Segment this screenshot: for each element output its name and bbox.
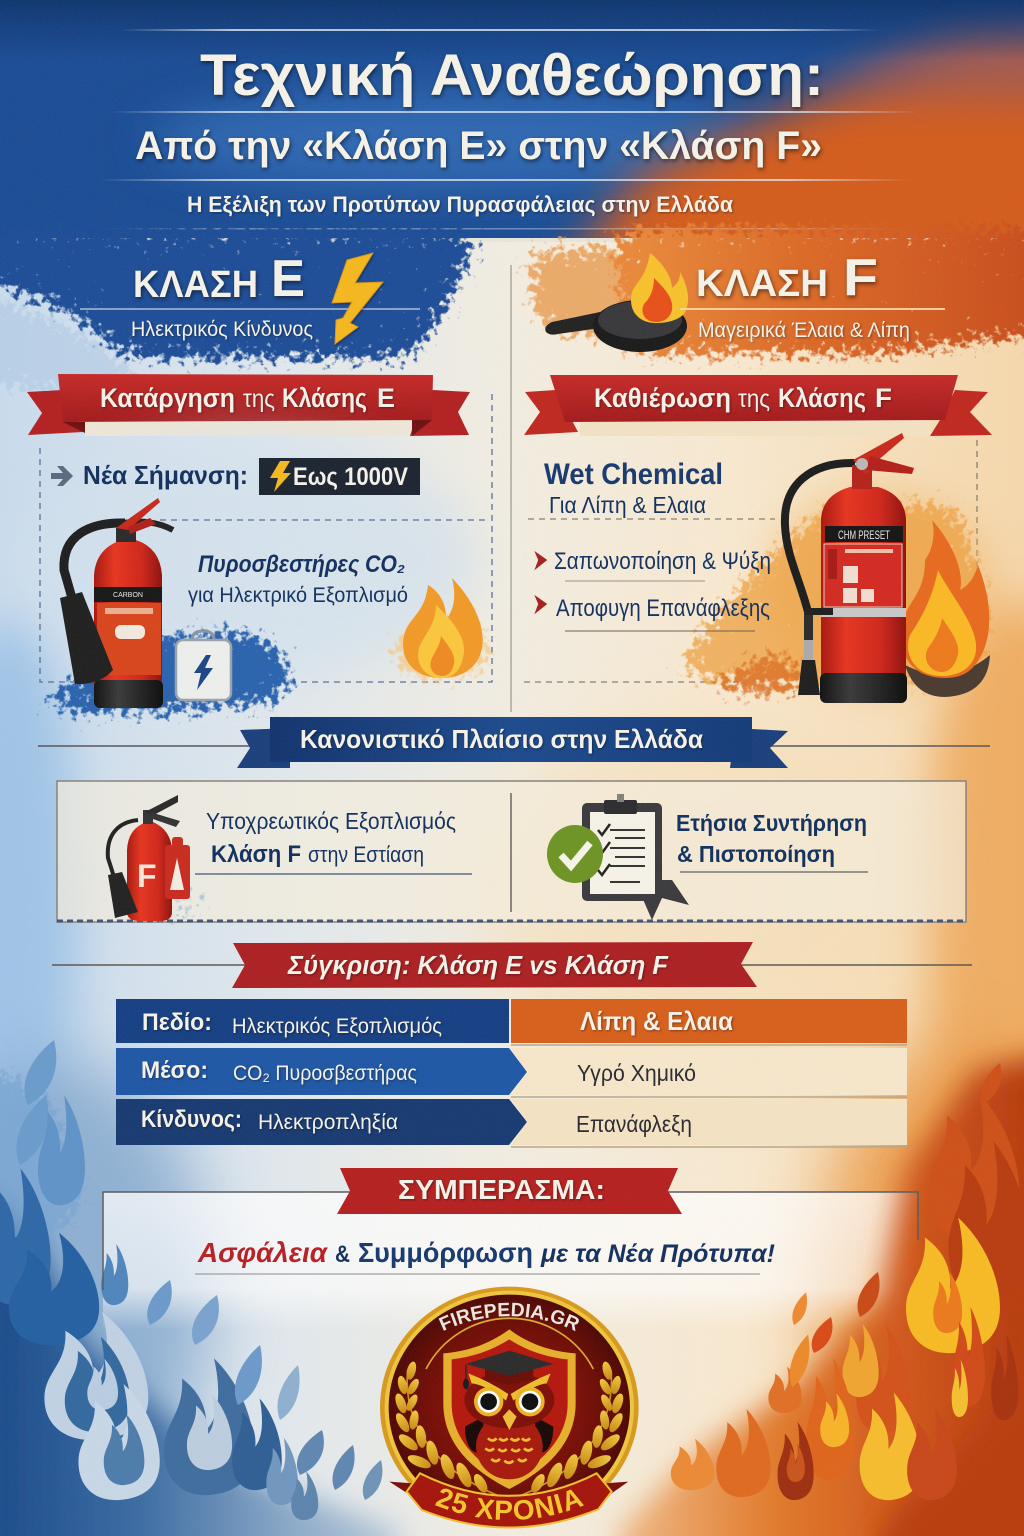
ribbon: abolition of class E: της	[243, 385, 275, 413]
banner: regulatory framework: Κανονιστικό Πλαίσιο στην Ελλάδα	[300, 724, 703, 754]
CO2 caption: για Ηλεκτρικό Εξοπλισμό	[188, 583, 408, 607]
icon: class F extinguisher: F	[137, 858, 157, 894]
class E heading	[80, 250, 420, 341]
badge ribbon	[390, 1472, 628, 1528]
reignition bullet: Αποφυγη Επανάφλεξης	[556, 595, 770, 622]
ribbon: establishment of class F: F	[875, 383, 892, 413]
annual maintenance caption: & Πιστοποίηση	[677, 841, 835, 867]
badge top text: FIREPEDIA.GR	[438, 1302, 579, 1332]
wet chemical extinguisher: CHM PRESET	[838, 528, 890, 542]
badge: firepedia 25 years	[380, 1286, 639, 1528]
mandatory equipment caption: στην Εστίαση	[308, 842, 424, 867]
annual maintenance caption: Ετήσια Συντήρηση	[676, 810, 867, 836]
wet chemical heading: Για Λίπη & Ελαια	[549, 492, 706, 518]
icon: battery with bolt	[176, 631, 231, 700]
class E heading: Ηλεκτρικός Κίνδυνος	[131, 317, 313, 341]
conclusion frame	[103, 1192, 918, 1290]
flames: blue left	[0, 1040, 400, 1536]
badge laurel	[393, 1361, 509, 1500]
table rows: class E	[116, 999, 527, 1145]
subtitle line: Από την «Κλάση Ε» στην «Κλάση F»	[135, 124, 822, 168]
table rows: class E: Κίνδυνος:	[141, 1106, 242, 1133]
ribbon: establishment of class F	[524, 375, 992, 436]
wet chemical heading: Wet Chemical	[544, 458, 723, 491]
new marking line: Νέα Σήμανση:	[83, 460, 248, 490]
ribbon: establishment of class F: Καθιέρωση	[594, 383, 731, 413]
saponification bullet	[536, 548, 771, 581]
class F heading	[680, 249, 945, 342]
mandatory equipment caption: Κλάση F	[211, 841, 301, 868]
annual maintenance caption	[676, 810, 868, 872]
CO2 extinguisher	[60, 498, 173, 708]
class E band	[0, 225, 485, 400]
conclusion statement: Ασφάλεια	[197, 1237, 329, 1268]
new marking line: Εως 1000V	[293, 463, 408, 491]
class F heading: F	[843, 249, 878, 307]
banner: regulatory framework	[38, 717, 990, 768]
banner: conclusion: ΣΥΜΠΕΡΑΣΜΑ:	[398, 1174, 605, 1205]
icon: class F extinguisher	[108, 795, 190, 921]
banner: comparison	[52, 942, 972, 988]
badge owl	[464, 1372, 554, 1479]
flame: class E	[385, 578, 490, 680]
comparison table	[116, 999, 907, 1147]
class F heading: ΚΛΑΣΗ	[696, 263, 828, 305]
blue splash behind CO2 extinguisher	[35, 628, 300, 716]
panel: class F dashed frame	[524, 440, 977, 682]
pale blue wash: class E panel	[20, 440, 480, 680]
conclusion statement: με τα Νέα Πρότυπα!	[540, 1240, 775, 1268]
ribbon: abolition of class E	[27, 374, 470, 436]
header background	[0, 0, 1024, 238]
table rows: class E: CO₂ Πυροσβεστήρας	[233, 1062, 417, 1085]
table rows: class E: Ηλεκτρικός Εξοπλισμός	[232, 1015, 442, 1038]
banner: comparison: Σύγκριση: Κλάση Ε vs Κλάση F	[287, 950, 669, 980]
badge laurel mirrored	[509, 1361, 626, 1500]
badge ribbon: 25 ΧΡΟΝΙΑ	[435, 1488, 584, 1520]
class E heading: Ε	[271, 250, 305, 308]
CO2 caption: Πυροσβεστήρες CO₂	[198, 551, 405, 578]
orange splash behind wet chemical extinguisher	[670, 495, 990, 698]
conclusion statement: Συμμόρφωση	[358, 1237, 533, 1268]
ribbon: establishment of class F: Κλάσης	[778, 383, 866, 413]
icon: lightning bolt	[332, 253, 383, 344]
class F heading: Μαγειρικά Έλαια & Λίπη	[698, 318, 910, 342]
wet chemical extinguisher	[785, 433, 914, 703]
CO2 caption	[188, 551, 408, 607]
banner: conclusion	[337, 1168, 682, 1214]
ribbon: abolition of class E: Κλάσης	[282, 383, 367, 413]
panel: conclusion backing	[103, 1192, 918, 1330]
new marking line	[51, 458, 420, 495]
badge shield	[443, 1329, 576, 1489]
class F band	[525, 225, 1024, 358]
flame in pan	[901, 520, 990, 697]
conclusion statement: &	[335, 1241, 350, 1268]
title: Τεχνική Αναθεώρηση:	[200, 43, 824, 108]
mandatory equipment caption	[195, 808, 472, 874]
icon: frying pan with flame	[545, 253, 688, 352]
table rows: class F: Υγρό Χημικό	[577, 1060, 696, 1086]
table rows: class E: Πεδίο:	[142, 1009, 212, 1036]
table rows: class E: Ηλεκτροπληξία	[258, 1111, 398, 1134]
icon: clipboard and check	[547, 794, 689, 920]
ribbon: abolition of class E: Ε	[377, 383, 395, 413]
saponification bullet: Σαπωνοποίηση & Ψύξη	[554, 548, 771, 575]
reignition bullet	[536, 595, 770, 631]
mandatory equipment caption: Υποχρεωτικός Εξοπλισμός	[206, 808, 456, 834]
table rows: class E: Μέσο:	[141, 1057, 208, 1084]
flames: orange right	[620, 1010, 1024, 1536]
CO2 extinguisher: CARBON	[113, 592, 143, 599]
column divider	[510, 265, 512, 712]
class E heading: ΚΛΑΣΗ	[133, 264, 258, 306]
header rule lines	[0, 29, 1024, 242]
header strapline: Η Εξέλιξη των Προτύπων Πυρασφάλειας στην Ελλάδα	[187, 192, 733, 217]
conclusion statement	[195, 1237, 775, 1274]
badge cap	[463, 1351, 553, 1389]
small blue splash	[125, 890, 230, 920]
panel: regulatory framework	[57, 781, 966, 922]
table rows: class F: Λίπη & Ελαια	[580, 1006, 733, 1036]
table rows: class F	[511, 999, 907, 1147]
table rows: class F: Επανάφλεξη	[576, 1111, 692, 1137]
panel: class E dashed frame	[40, 393, 492, 682]
ribbon: abolition of class E: Κατάργηση	[100, 383, 235, 413]
ribbon: establishment of class F: της	[738, 385, 770, 413]
wet chemical heading	[544, 458, 723, 518]
